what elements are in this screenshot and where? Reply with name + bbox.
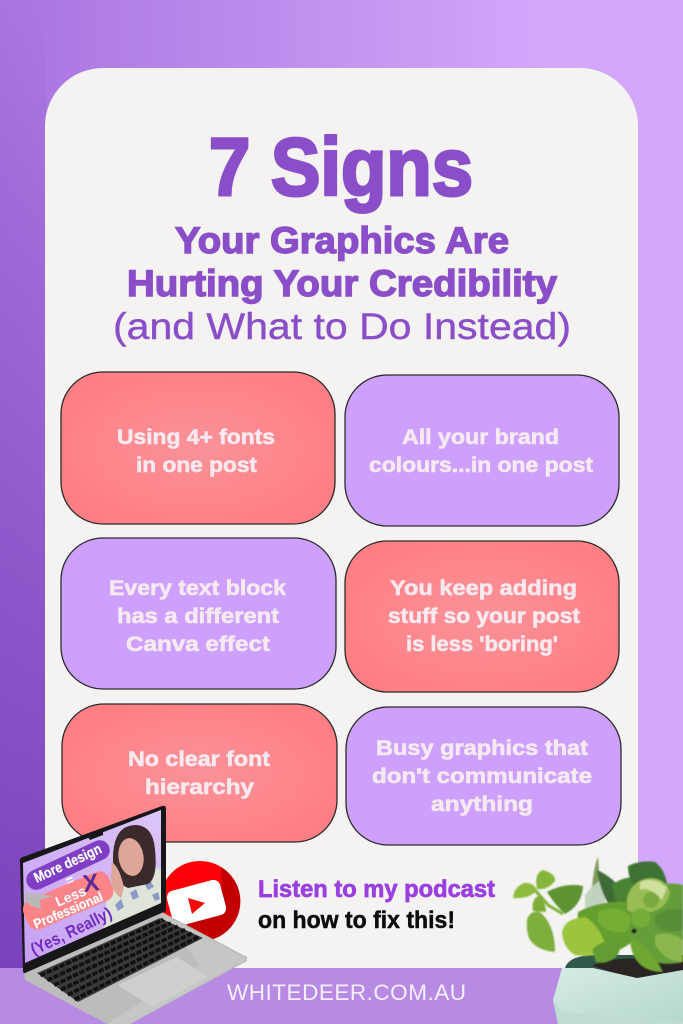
card: different canva effect: has a different [117, 604, 279, 628]
screen headline: More design [32, 841, 104, 887]
subheading line 3: (and What to Do Instead) [113, 306, 571, 347]
screen pointing hand [25, 893, 53, 909]
screen person [103, 825, 162, 932]
icon: youtube badge [160, 861, 240, 941]
screen headline: = [62, 871, 77, 889]
card: different canva effect: Canva effect [126, 632, 270, 656]
card: using 4+ fonts: Using 4+ fonts [117, 425, 275, 449]
card: using 4+ fonts [61, 372, 335, 524]
card: different canva effect [61, 538, 336, 689]
plant leaves [513, 857, 683, 972]
card: busy graphics [346, 707, 621, 845]
main panel [45, 68, 638, 968]
screen headline: X [81, 869, 101, 898]
illustration: potted plant [513, 857, 683, 1024]
laptop keyboard [37, 918, 203, 1002]
heading: 7 Signs: 7 Signs [209, 122, 473, 213]
laptop deck [24, 911, 247, 1024]
card: busy graphics: anything [431, 792, 533, 816]
screen headline [20, 837, 117, 959]
laptop screen [20, 806, 166, 973]
plant soil [592, 955, 683, 979]
title [113, 122, 571, 347]
screen headline: (Yes, Really) [28, 904, 115, 959]
illustration: laptop [20, 806, 247, 1024]
card: busy graphics: Busy graphics that [376, 736, 588, 760]
card: all your brand colours: colours...in one post [369, 453, 593, 477]
callout: podcast [258, 876, 495, 934]
callout: podcast: on how to fix this! [258, 907, 455, 934]
subheading line 2: Hurting Your Credibility [127, 263, 557, 304]
plant pot [553, 968, 683, 1024]
card: no clear font hierarchy: hierarchy [145, 775, 254, 799]
laptop trackpad [118, 957, 208, 1007]
footer band [0, 968, 683, 1024]
card: using 4+ fonts: in one post [136, 453, 257, 477]
card: keep adding stuff: You keep adding [390, 576, 577, 600]
plant pot rim [565, 955, 660, 980]
card: different canva effect: Every text block [109, 576, 286, 600]
footer url: WHITEDEER.COM.AU [227, 980, 466, 1005]
card: no clear font hierarchy: No clear font [128, 747, 270, 771]
callout: podcast: Listen to my podcast [258, 876, 495, 903]
card: all your brand colours [345, 375, 619, 526]
screen headline: Less [53, 882, 89, 910]
card: all your brand colours: All your brand [402, 425, 559, 449]
subheading line 1: Your Graphics Are [175, 220, 509, 261]
card: keep adding stuff: stuff so your post [388, 604, 580, 628]
card: busy graphics: don't communicate [372, 764, 592, 788]
card: keep adding stuff: is less 'boring' [406, 632, 558, 656]
card: no clear font hierarchy [62, 704, 337, 842]
screen headline: Professional [31, 889, 105, 932]
card: keep adding stuff [345, 541, 619, 692]
